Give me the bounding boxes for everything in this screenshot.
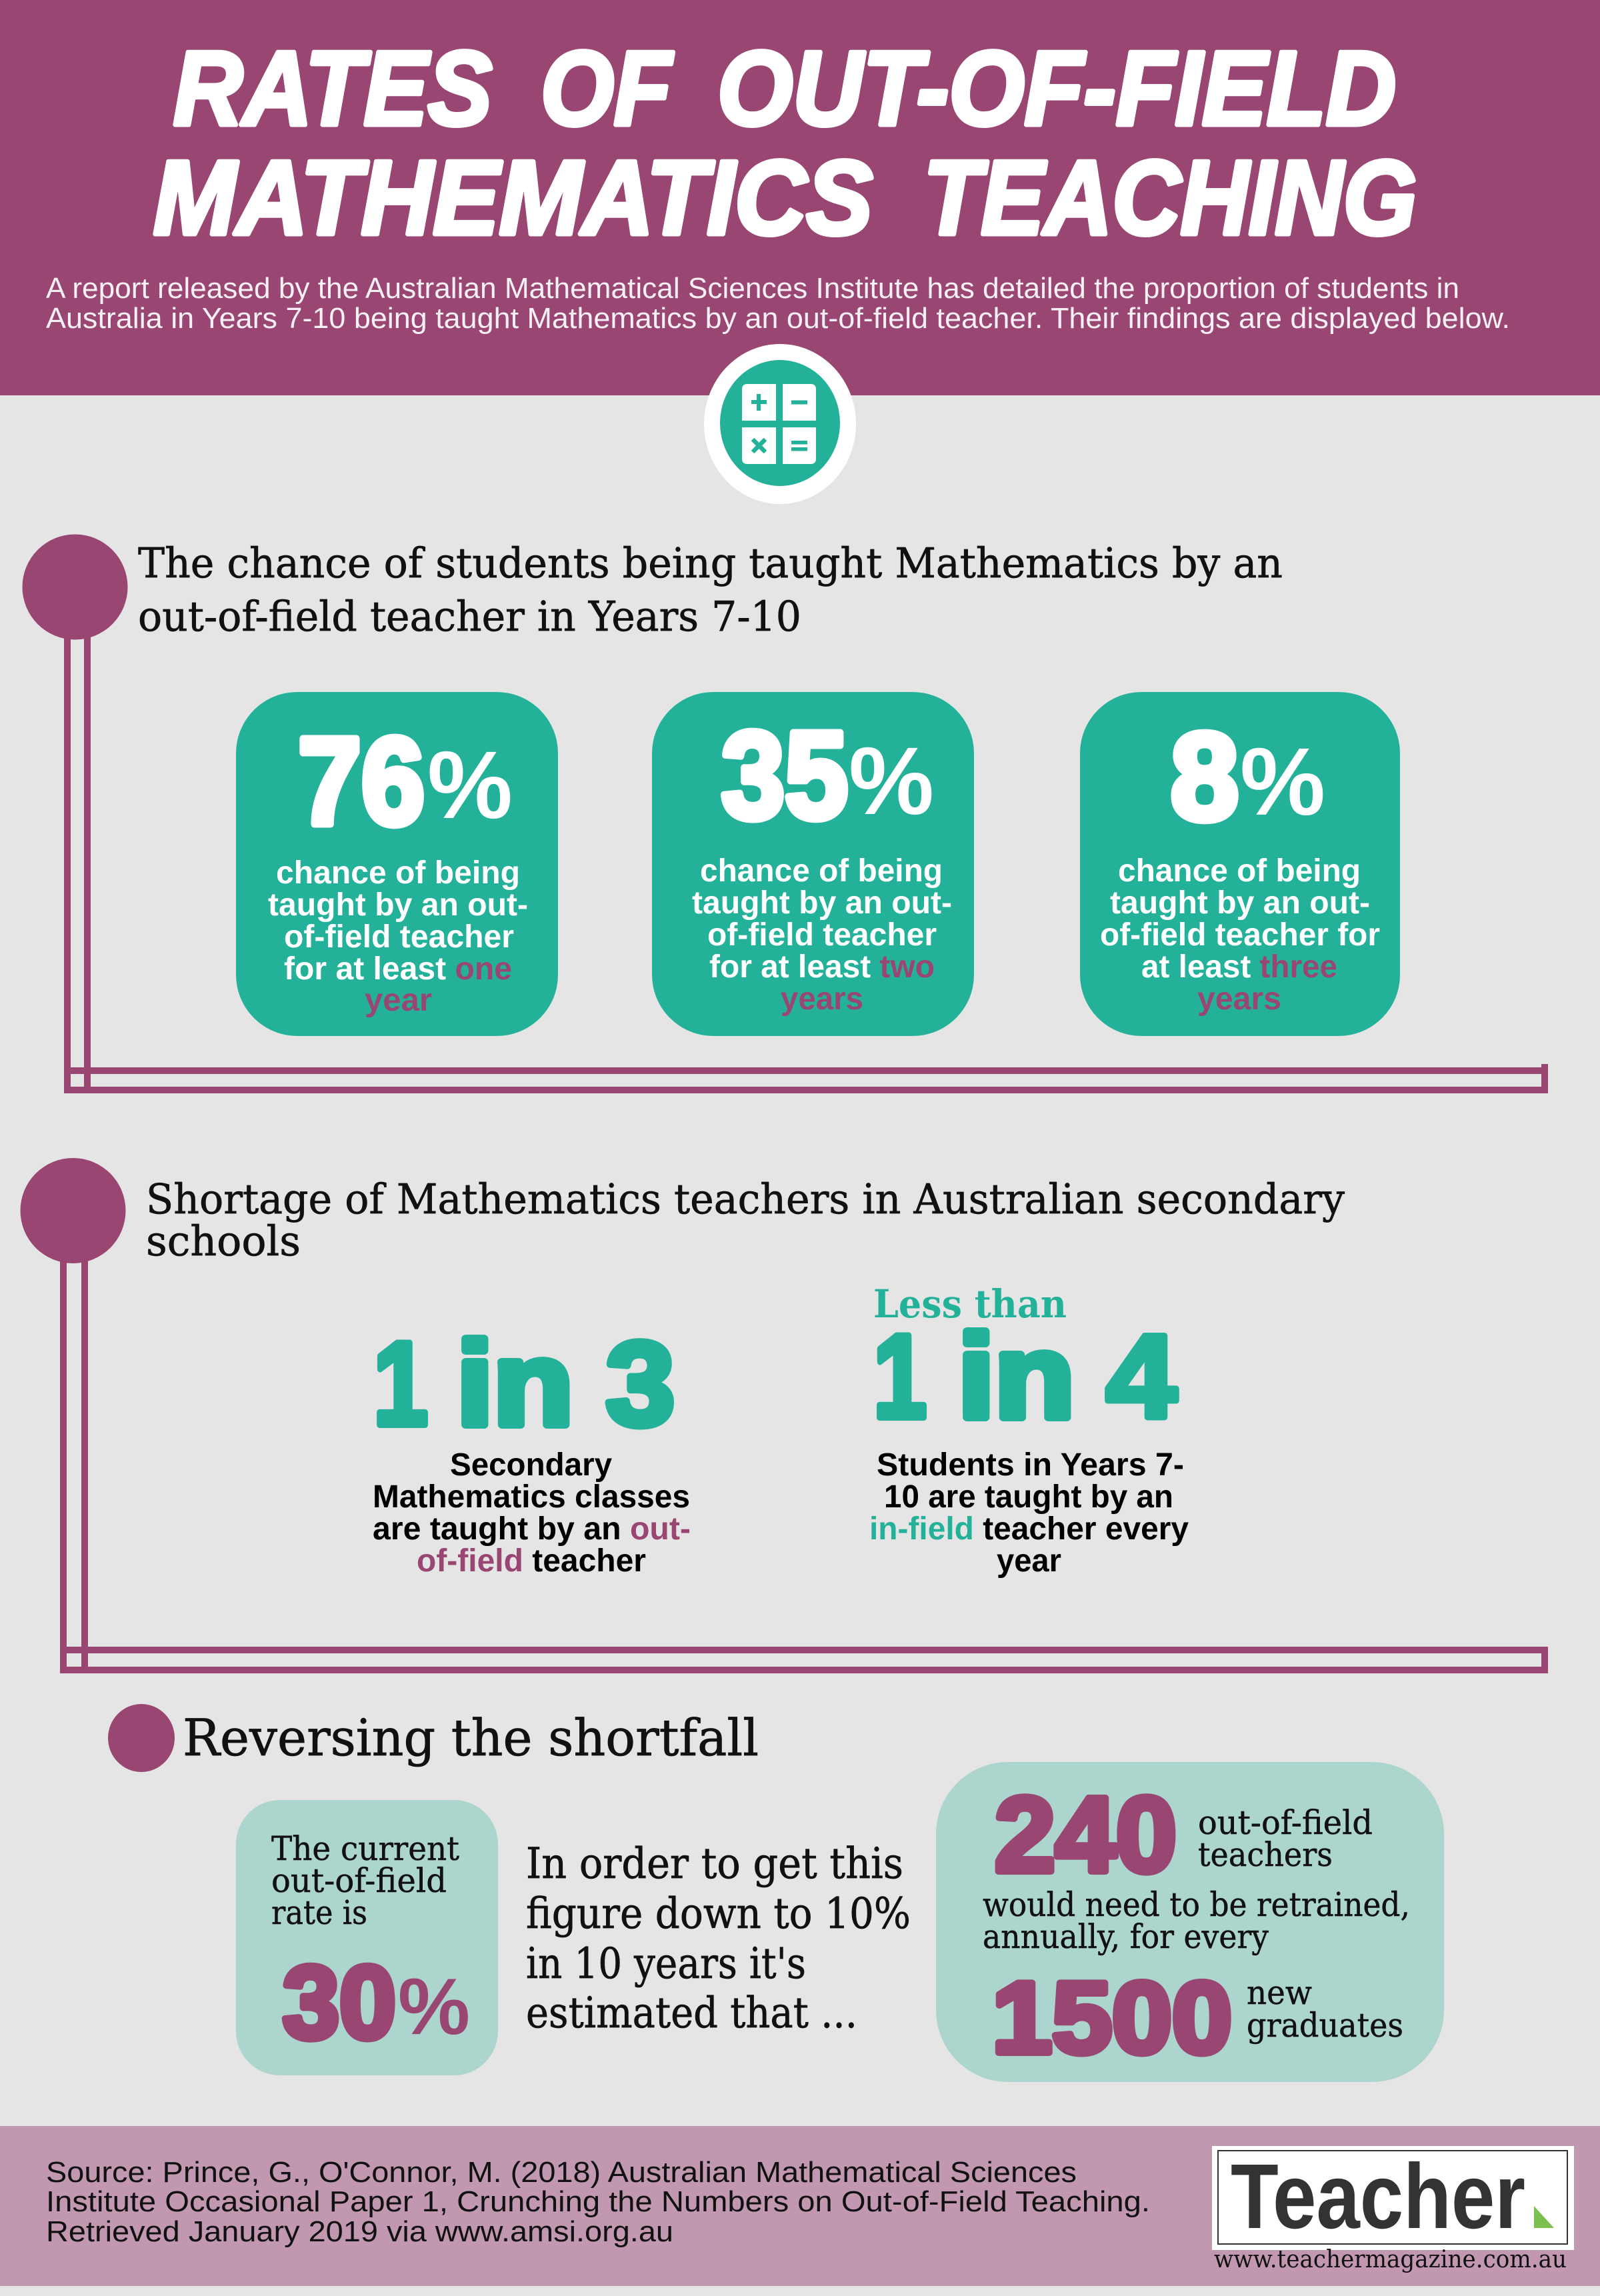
- card 1 caption: year: [365, 983, 432, 1018]
- card 1 caption: chance of being: [276, 855, 520, 891]
- stat: 76%: [298, 713, 513, 851]
- caption 1 in 3: of-field teacher: [417, 1543, 646, 1579]
- retrained text: [983, 1885, 1410, 1956]
- caption 1 in 4: in-field teacher every: [869, 1511, 1189, 1547]
- stat: 8%: %: [1240, 728, 1325, 835]
- figure 1 in 3: 3: [606, 1317, 675, 1450]
- source text: [46, 2156, 1150, 2248]
- 1500 label: [1247, 1973, 1403, 2045]
- retrained text: annually, for every: [983, 1917, 1269, 1956]
- 240 label: teachers: [1198, 1835, 1333, 1874]
- stat: 30%: [283, 1945, 470, 2060]
- figure 1 in 4: in: [958, 1310, 1075, 1443]
- card 3 caption: of-field teacher for: [1100, 917, 1380, 953]
- section 1 heading: The chance of students being taught Mathematics by an: [138, 539, 1283, 587]
- card 2 caption: for at least two: [709, 949, 935, 985]
- section 3 bullet circle: [108, 1704, 175, 1772]
- title: RATES: [173, 30, 492, 147]
- intro text: Australia in Years 7-10 being taught Mathematics by an out-of-field teacher. Their findings are displayed below.: [46, 302, 1510, 335]
- stat: less than 1 in 4: [869, 1281, 1189, 1579]
- section 2 heading: schools: [146, 1217, 301, 1265]
- current rate text: The current: [271, 1829, 459, 1868]
- panel: 76 percent: [236, 692, 558, 1036]
- caption 1 in 3: Mathematics classes: [373, 1479, 690, 1515]
- section 2 heading: Shortage of Mathematics teachers in Australian secondary: [146, 1175, 1345, 1223]
- card 1 caption: taught by an out-: [268, 887, 528, 923]
- current rate text: out-of-field: [271, 1861, 447, 1900]
- 1500 label: new: [1247, 1973, 1312, 2012]
- card 2 caption: years: [781, 981, 863, 1017]
- card 1 caption: for at least one: [284, 951, 512, 987]
- caption 1 in 4: Students in Years 7-: [877, 1447, 1184, 1483]
- title: MATHEMATICS: [153, 139, 873, 257]
- middle text: estimated that ...: [526, 1989, 857, 2038]
- title: OUT-OF-FIELD: [717, 30, 1396, 147]
- website url: www.teachermagazine.com.au: [1214, 2246, 1567, 2273]
- title: [153, 30, 1417, 257]
- section 2 bullet circle: [20, 1158, 125, 1263]
- stat: 35%: [721, 707, 934, 845]
- figure 1 in 3: 1: [373, 1317, 428, 1450]
- current rate text: rate is: [271, 1893, 367, 1932]
- footer band: [0, 2126, 1600, 2286]
- caption 1 in 3: [373, 1447, 691, 1579]
- source text: Institute Occasional Paper 1, Crunching the Numbers on Out-of-Field Teaching.: [46, 2185, 1150, 2218]
- section 1 heading: out-of-field teacher in Years 7-10: [138, 592, 801, 641]
- card 2 caption: of-field teacher: [707, 917, 937, 953]
- intro text: [46, 272, 1510, 335]
- caption 1 in 4: 10 are taught by an: [884, 1479, 1173, 1515]
- middle text: in 10 years it's: [526, 1939, 806, 1989]
- stat: 35%: %: [849, 727, 934, 835]
- stat: 8%: 8: [1171, 708, 1239, 846]
- middle text: In order to get this: [526, 1839, 903, 1889]
- panel: current rate: [236, 1800, 498, 2075]
- caption 1 in 3: are taught by an out-: [373, 1511, 691, 1547]
- title: TEACHING: [923, 139, 1417, 257]
- stat: 1 in 3: [373, 1317, 691, 1579]
- intro text: A report released by the Australian Mathematical Sciences Institute has detailed the proportion of students in: [46, 272, 1459, 305]
- stat: 76%: 76: [298, 713, 425, 851]
- less than label: Less than: [873, 1281, 1067, 1327]
- section 2 heading: [146, 1175, 1345, 1265]
- card 3 caption: at least three: [1141, 949, 1337, 985]
- panel: 35 percent: [652, 692, 974, 1036]
- figure 1 in 4: [873, 1310, 1177, 1443]
- card 1 caption: of-field teacher: [284, 919, 514, 955]
- section 2 frame lines: [60, 1257, 1548, 1673]
- card 3 caption: taught by an out-: [1110, 885, 1370, 921]
- panel: retraining estimate: [936, 1762, 1444, 2082]
- panel: 8 percent: [1080, 692, 1400, 1036]
- caption 1 in 4: year: [997, 1543, 1061, 1579]
- section 1 heading: [138, 539, 1283, 641]
- section 1 frame lines: [64, 633, 1548, 1093]
- figure 1 in 3: in: [457, 1317, 573, 1450]
- stat: 8%: [1171, 708, 1325, 846]
- card 1 caption: [268, 855, 528, 1018]
- source text: Retrieved January 2019 via www.amsi.org.au: [46, 2215, 673, 2248]
- title: OF: [541, 30, 673, 147]
- header band: [0, 0, 1600, 395]
- 1500 label: graduates: [1247, 2006, 1403, 2045]
- stat: 30%: %: [398, 1962, 470, 2051]
- figure 1 in 4: 1: [873, 1310, 927, 1443]
- section 3 heading: Reversing the shortfall: [183, 1708, 759, 1767]
- logo: Teacher: Teacher: [1231, 2145, 1525, 2248]
- card 2 caption: [692, 853, 952, 1017]
- 240 label: out-of-field: [1198, 1803, 1373, 1842]
- 240 label: [1198, 1803, 1373, 1874]
- current rate text: [271, 1829, 459, 1932]
- stat: 30%: 30: [283, 1945, 396, 2060]
- stat: 76%: %: [427, 731, 513, 839]
- caption 1 in 4: [869, 1447, 1189, 1579]
- figure 1 in 3: [373, 1317, 675, 1450]
- middle text: [526, 1839, 911, 2038]
- caption 1 in 3: Secondary: [450, 1447, 612, 1483]
- stat: 35%: 35: [721, 707, 848, 845]
- card 2 caption: taught by an out-: [692, 885, 952, 921]
- card 3 caption: years: [1197, 981, 1281, 1017]
- card 3 caption: [1100, 853, 1380, 1017]
- source text: Source: Prince, G., O'Connor, M. (2018) Australian Mathematical Sciences: [46, 2156, 1077, 2189]
- card 2 caption: chance of being: [700, 853, 943, 889]
- icon: calculator badge: [704, 344, 856, 504]
- stat: 1500: 1500: [992, 1961, 1232, 2075]
- figure 1 in 4: 4: [1106, 1310, 1177, 1443]
- stat: 240: 240: [995, 1775, 1177, 1894]
- retrained text: would need to be retrained,: [983, 1885, 1410, 1924]
- section 1 bullet circle: [23, 535, 128, 640]
- middle text: figure down to 10%: [526, 1889, 911, 1939]
- card 3 caption: chance of being: [1118, 853, 1361, 889]
